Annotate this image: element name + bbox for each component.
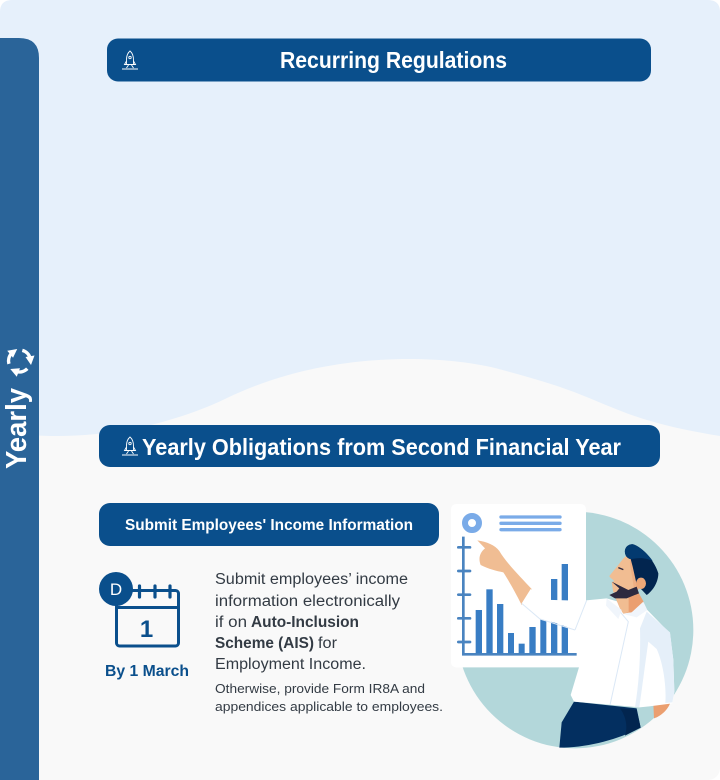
sidebar: Yearly — [0, 38, 39, 780]
text block: secondary note — [215, 681, 443, 714]
shirt — [522, 589, 674, 707]
icon: recurring arrows — [3, 346, 34, 379]
icon: rocket small — [122, 437, 138, 455]
teal circle — [457, 512, 693, 748]
illustration: man presenting chart — [451, 504, 693, 748]
text block: main description: for — [318, 635, 337, 652]
subheading: Submit Employees' Income Information — [99, 503, 439, 546]
heading: Recurring Regulations — [107, 38, 651, 82]
skin: lower arm — [653, 702, 671, 718]
icon: calendar — [99, 572, 179, 646]
text block: main description: information electronically — [215, 593, 400, 610]
icon: calendar: D — [110, 580, 122, 599]
beard — [609, 582, 639, 598]
face — [609, 551, 641, 592]
text block: main description — [215, 571, 408, 673]
heading text: Recurring Regulations — [280, 47, 507, 73]
pants — [559, 702, 641, 748]
text block: main description: Employment Income. — [215, 656, 366, 673]
skin: forearm and hand — [477, 540, 532, 605]
text block: main description: Auto-Inclusion — [251, 614, 359, 631]
neck — [615, 592, 644, 614]
collar — [606, 598, 647, 619]
icon: calendar: 1 — [140, 616, 153, 643]
text block: main description: Scheme (AIS) — [215, 635, 314, 652]
date label: By 1 March — [105, 663, 189, 680]
subheading: Submit Employees' Income Information: Submit Employees' Income Information — [125, 517, 413, 534]
ear — [636, 578, 646, 589]
text block: main description: if on — [215, 614, 247, 631]
icon: rocket — [122, 51, 138, 69]
heading text: Yearly Obligations from Second Financial Year — [142, 434, 621, 460]
text block: secondary note: appendices applicable to employees. — [215, 699, 443, 714]
eye — [618, 568, 623, 570]
hair — [625, 544, 658, 595]
shirt shading — [635, 612, 674, 707]
text block: main description: Submit employees’ income — [215, 571, 408, 588]
heading: Yearly Obligations from Second Financial Year — [99, 425, 660, 467]
sidebar label: Yearly — [1, 388, 33, 469]
text block: secondary note: Otherwise, provide Form IR8A and — [215, 681, 425, 696]
chart panel — [451, 504, 586, 667]
